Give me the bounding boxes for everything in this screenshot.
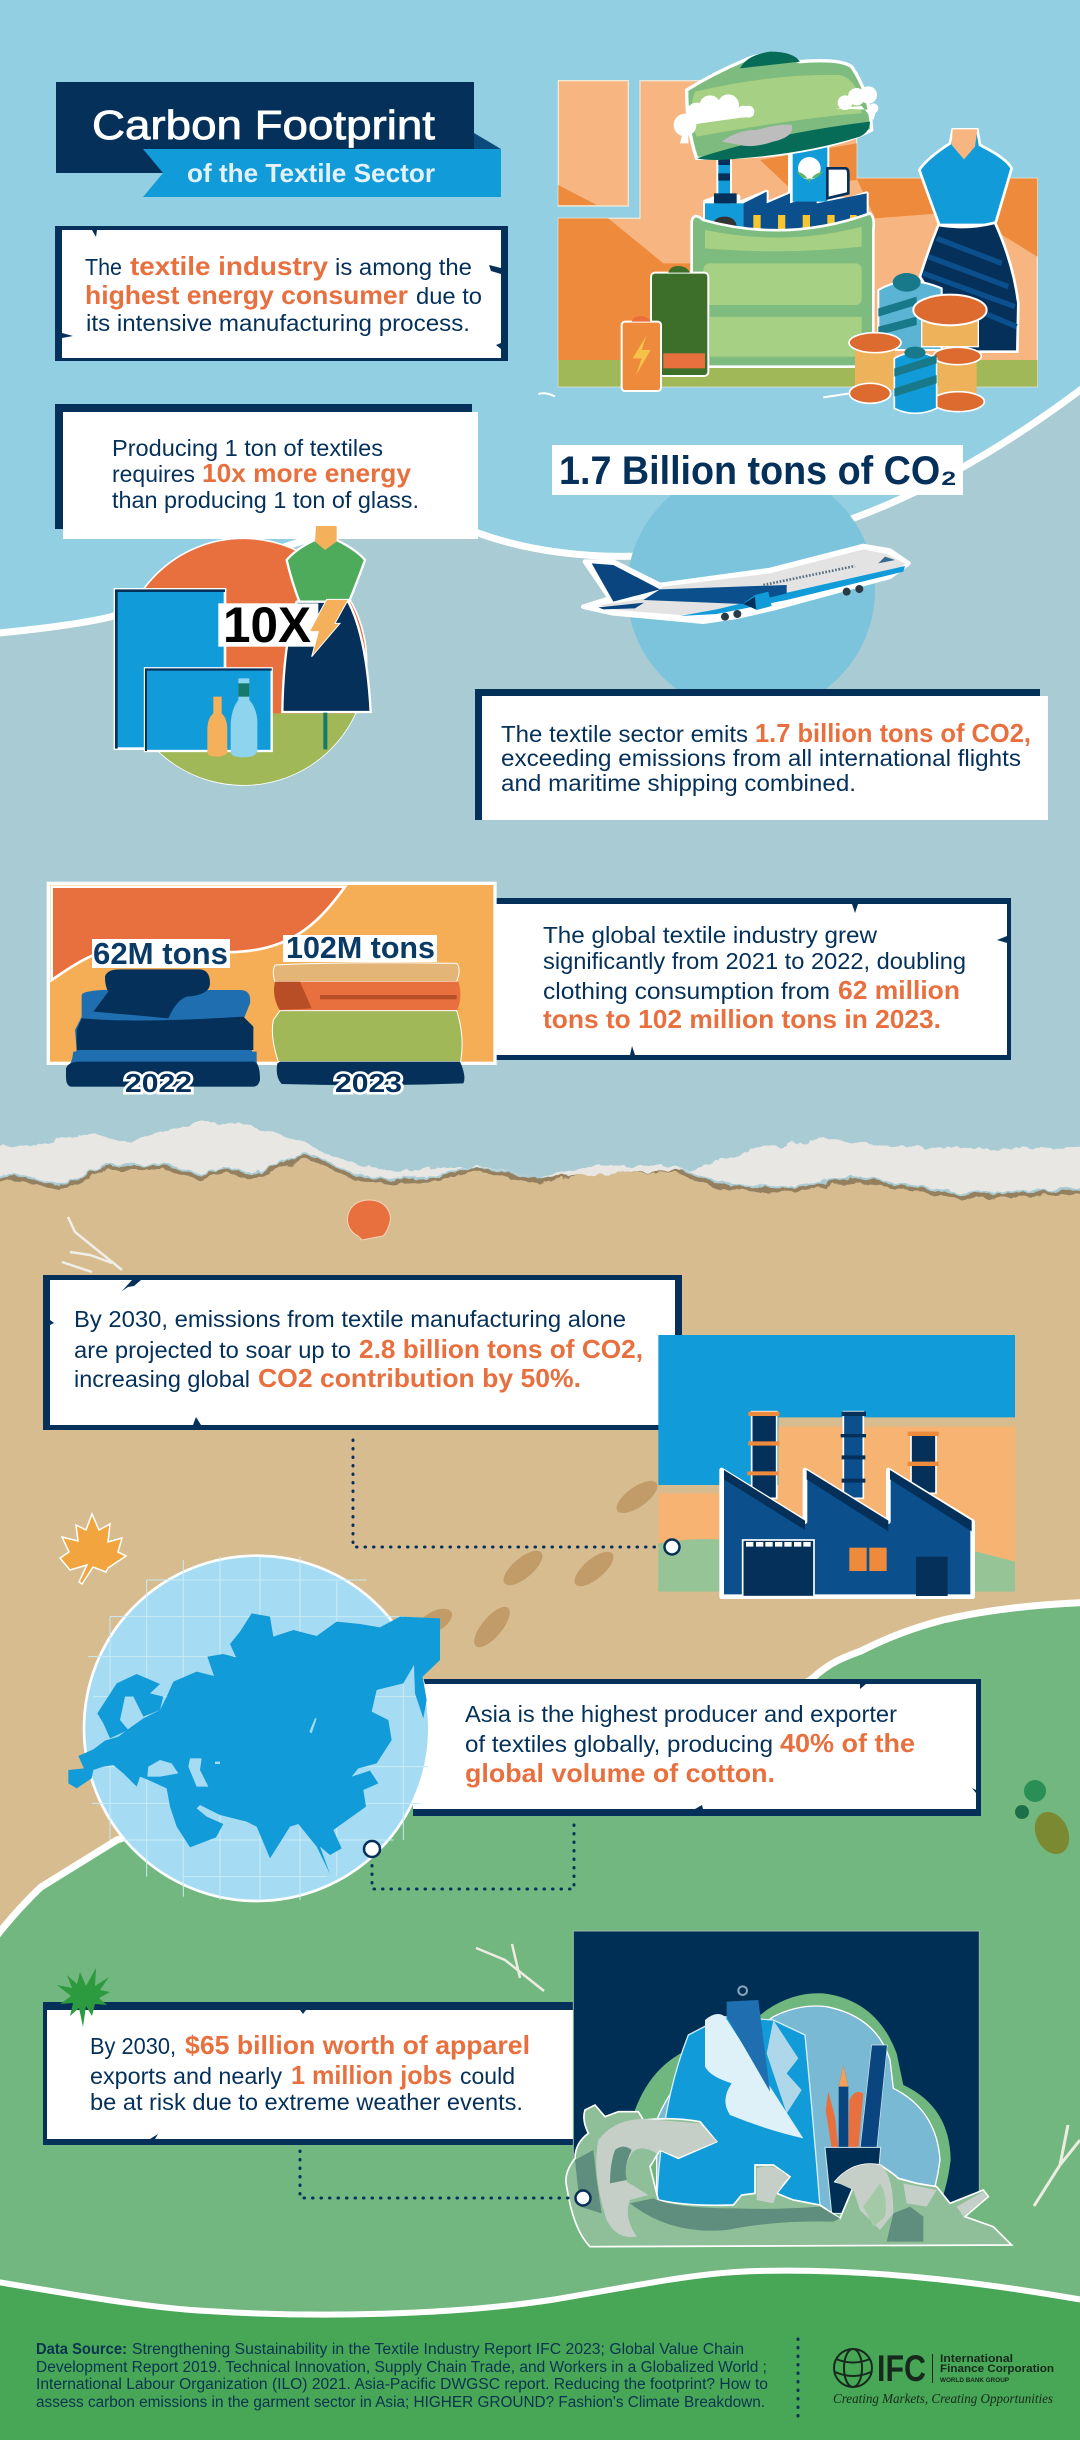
- small battery: [622, 322, 661, 391]
- illustration: 10X glass vs dress: [115, 526, 371, 785]
- panel: 2.8 billion tons text: [43, 1275, 682, 1430]
- panel: apparel exports text: be at risk due to extreme weather events.: [90, 2089, 523, 2115]
- panel: 2.8 billion tons text: By 2030, emissions from textile manufacturing alone: [74, 1306, 626, 1332]
- wisp and thread: [538, 393, 850, 397]
- panel: Asia text: Asia is the highest producer and exporter: [465, 1701, 897, 1727]
- marker: factory: [664, 1540, 680, 1554]
- panel: apparel exports text: [43, 2002, 583, 2145]
- panel: clothing consumption text: The global textile industry grew: [543, 922, 877, 948]
- 10X label: [218, 603, 318, 647]
- background: sea, grey blue band: [0, 375, 1080, 1300]
- footer divider: [796, 2339, 800, 2418]
- panel: Asia text: 40% of the: [780, 1728, 915, 1758]
- connector: factory: [353, 1440, 660, 1547]
- panel: 10x energy text: 10x more energy: [202, 458, 412, 488]
- Asia landmass: [68, 1613, 440, 1874]
- panel: 1.7 billion tons text: 1.7 billion tons of CO2,: [755, 718, 1031, 748]
- large glass pane: [115, 589, 225, 749]
- icon: spiky plant: [57, 1968, 110, 2027]
- panel: 1.7 billion tons text: exceeding emissions from all international flights: [501, 745, 1021, 771]
- icons: footprints on sand: [412, 1475, 662, 1653]
- background: sea, top blue: [0, 0, 1080, 1300]
- panel: 10x energy text: [55, 404, 478, 539]
- inland seas: [147, 1718, 317, 1787]
- ribbon fold: [474, 133, 501, 149]
- background: sand: [0, 1157, 1080, 2000]
- panel: 10x energy text: than producing 1 ton of glass.: [112, 487, 419, 513]
- 10X text: 10X: [223, 597, 311, 653]
- panel: energy consumer text: its intensive manufacturing process.: [86, 310, 470, 336]
- icon: shell: [347, 1200, 390, 1240]
- illustration: clothing piles 2022 vs 2023: [48, 883, 495, 1087]
- lightning: [309, 599, 348, 657]
- label: 2023: 2023: [335, 1068, 402, 1098]
- icon: leaves right: [1015, 1780, 1076, 1860]
- panel: energy consumer text: due to: [416, 283, 482, 309]
- panel: clothing consumption text: tons to 102 million tons in 2023.: [543, 1004, 941, 1034]
- logo: IFC: Finance Corporation: [940, 2363, 1054, 2375]
- blue ribbon: [143, 149, 501, 197]
- sky panel: [658, 1335, 1015, 1485]
- panel: apparel exports text: exports and nearly: [90, 2063, 282, 2089]
- marker: Asia: [364, 1841, 380, 1857]
- panel: energy consumer text: is among the: [335, 254, 472, 280]
- green ground: [658, 1539, 1015, 1592]
- panel: apparel exports text: By 2030,: [90, 2033, 176, 2059]
- icon: twig green area: [476, 1944, 544, 1991]
- Scandinavia: [97, 1674, 163, 1738]
- pen cup: [825, 2147, 881, 2213]
- bag flap: [687, 55, 872, 158]
- footer: data source: assess carbon emissions in the garment sector in Asia; HIGHER GROUND? Fashion's Climate Breakdown.: [36, 2394, 765, 2411]
- chimneys: [752, 1412, 777, 1498]
- panel: clothing consumption text: significantly from 2021 to 2022, doubling: [543, 948, 966, 974]
- blue circle behind plane: [627, 466, 875, 714]
- marker: waves: [576, 2190, 590, 2206]
- icon: globe: [834, 2349, 872, 2387]
- connector: waves: [300, 2151, 572, 2198]
- panel: energy consumer text: The: [85, 254, 122, 280]
- pile 2023: [272, 963, 464, 1085]
- dress form: [919, 129, 1018, 352]
- clouds: [674, 86, 878, 143]
- panel: 1.7 billion tons text: [475, 689, 1048, 820]
- panel: 1.7 billion tons text: The textile sector emits: [501, 721, 748, 747]
- icon: twig: [62, 1217, 122, 1272]
- circle: [120, 538, 367, 785]
- panel: Asia text: [413, 1679, 981, 1816]
- illustration: factory: [658, 1335, 1015, 1597]
- door: [743, 1540, 814, 1597]
- small glass pane: [145, 668, 272, 751]
- panel: clothing consumption text: clothing consumption from: [543, 978, 830, 1004]
- footer: data source: Strengthening Sustainability in the Textile Industry Report IFC 2023; Global Value Chain: [132, 2341, 744, 2358]
- heading: Carbon Footprint: [92, 102, 436, 148]
- pile 2022: [66, 969, 260, 1087]
- subheading: of the Textile Sector: [187, 158, 435, 188]
- logo: IFC: Creating Markets, Creating Opportunities: [833, 2392, 1054, 2407]
- logo: IFC: [833, 2348, 1054, 2407]
- icon: twig right edge: [1034, 2125, 1080, 2206]
- label: 2022: 2022: [125, 1068, 192, 1098]
- building: [722, 1470, 973, 1597]
- windows: [849, 1548, 867, 1571]
- background: foam: [0, 1122, 1080, 1193]
- panel: clothing consumption text: [493, 898, 1011, 1060]
- panel: apparel exports text: could: [460, 2063, 515, 2089]
- thread spools: [849, 273, 987, 413]
- factory: [705, 138, 867, 230]
- panel: apparel exports text: 1 million jobs: [291, 2060, 452, 2090]
- background: green land: [0, 1602, 1080, 2440]
- panel: 2.8 billion tons text: increasing global: [74, 1366, 250, 1392]
- footer: data source: [36, 2341, 768, 2411]
- panel: Asia text: global volume of cotton.: [465, 1758, 775, 1788]
- big battery: [651, 273, 708, 376]
- panel: [48, 883, 495, 1063]
- label: 62M tons: 62M tons: [93, 936, 228, 971]
- logo: IFC: IFC: [877, 2348, 926, 2389]
- cloud: [635, 1993, 951, 2220]
- panel: energy consumer text: [55, 226, 508, 361]
- footer: data source: Development Report 2019. Technical Innovation, Supply Chain Trade, and Workers in a Globalized World ;: [36, 2359, 767, 2376]
- illustration: textile bag factory with dress, batteries, spools: [538, 52, 1037, 413]
- peach ground: [658, 1427, 1015, 1562]
- smoke: [722, 125, 792, 146]
- panel: Asia text: of textiles globally, producing: [465, 1731, 773, 1757]
- panel: energy consumer text: textile industry: [130, 251, 329, 281]
- panel: 1.7 billion tons text: and maritime shipping combined.: [501, 770, 856, 796]
- waves: [566, 2105, 1012, 2247]
- footer: data source: Data Source:: [36, 2341, 127, 2358]
- panel: clothing consumption text: 62 million: [838, 975, 960, 1005]
- panel: 2.8 billion tons text: 2.8 billion tons of CO2,: [359, 1334, 643, 1364]
- hanger / collar: [727, 2000, 770, 2092]
- dark panel: [573, 1931, 979, 2203]
- panel: 10x energy text: Producing 1 ton of textiles: [112, 435, 383, 461]
- panel: apparel exports text: $65 billion worth of apparel: [185, 2030, 530, 2060]
- icon: airplane: [583, 546, 908, 622]
- panel: 2.8 billion tons text: are projected to soar up to: [74, 1337, 351, 1363]
- footer: data source: International Labour Organization (ILO) 2021. Asia-Pacific DWGSC report. Reducing the footprint? How to: [36, 2376, 768, 2393]
- logo: IFC: International: [940, 2353, 1013, 2365]
- dress form: [287, 527, 365, 603]
- bag body: [692, 213, 874, 367]
- connector: Asia: [372, 1825, 574, 1889]
- globe: [84, 1556, 429, 1901]
- logo: IFC: WORLD BANK GROUP: [940, 2377, 1010, 2384]
- panel: energy consumer text: highest energy consumer: [85, 280, 408, 310]
- label: 102M tons: 102M tons: [286, 930, 435, 965]
- panel: 2.8 billion tons text: CO2 contribution by 50%.: [258, 1363, 581, 1393]
- jacket: [657, 2017, 820, 2207]
- title banner: [56, 82, 501, 197]
- dark title plate: [56, 82, 474, 173]
- bottles: [207, 697, 227, 757]
- panel: 10x energy text: requires: [112, 461, 195, 487]
- heading: 1.7 billion tons: 1.7 Billion tons of CO₂: [559, 449, 957, 493]
- illustration: globe with Asia: [68, 1556, 440, 1901]
- background panels: [558, 81, 628, 206]
- background: footer green: [0, 2271, 1080, 2440]
- illustration: jacket, stationery and waves: [566, 1931, 1012, 2247]
- pencils and ruler: [860, 2045, 887, 2150]
- icon: maple leaf: [60, 1514, 126, 1584]
